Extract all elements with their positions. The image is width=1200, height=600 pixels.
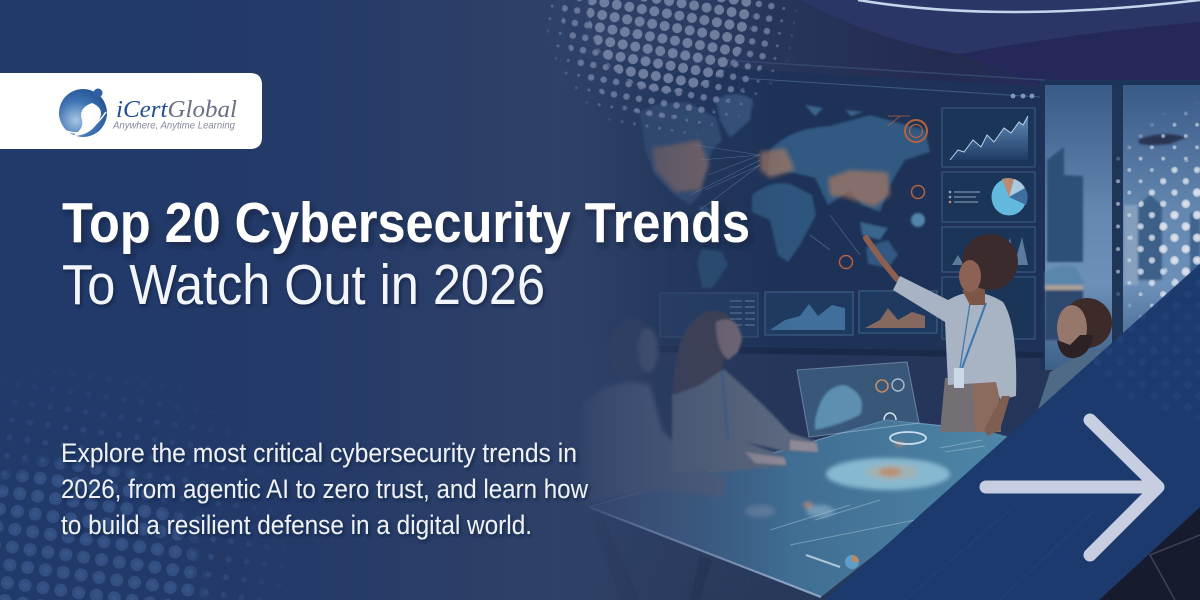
floor bbox=[650, 548, 876, 600]
screen status dots bbox=[1011, 94, 1034, 98]
halftone dots: top centre bbox=[546, 0, 798, 134]
panel: lower right bbox=[942, 277, 1035, 339]
panel: bottom blue area chart bbox=[765, 292, 853, 335]
arrow icon bbox=[986, 420, 1158, 555]
title: Top 20 Cybersecurity Trends bbox=[62, 191, 750, 255]
hot spots bbox=[652, 140, 890, 207]
panel: bottom data table bbox=[660, 293, 758, 337]
description text: Explore the most critical cybersecurity trends in bbox=[61, 438, 577, 468]
seated man bbox=[596, 326, 725, 498]
seated man right bbox=[1037, 298, 1115, 412]
halftone dots: right window bbox=[1116, 103, 1200, 318]
logo panel bbox=[0, 73, 262, 149]
windows with skyline bbox=[1040, 80, 1200, 370]
panel: pie chart bbox=[942, 172, 1035, 222]
description text: 2026, from agentic AI to zero trust, and learn how bbox=[61, 474, 588, 504]
world map bbox=[640, 94, 930, 288]
halftone dots: bottom left bbox=[0, 396, 266, 600]
diagonal blue band bbox=[825, 264, 1200, 600]
panel: spike chart bbox=[942, 227, 1035, 272]
seated woman bbox=[672, 311, 818, 472]
description text bbox=[61, 438, 588, 540]
photo scene: control room bbox=[560, 0, 1200, 600]
glass tablet bbox=[797, 362, 919, 437]
logo wordmark: iCertGlobal bbox=[116, 97, 237, 123]
dark chair corner bbox=[1099, 507, 1200, 600]
title bbox=[62, 191, 750, 317]
panel: line chart bbox=[942, 108, 1035, 167]
ceiling bbox=[714, 0, 1200, 87]
description text: to build a resilient defense in a digital world. bbox=[61, 510, 532, 540]
panel: bottom orange area chart bbox=[859, 291, 937, 333]
wall screen bbox=[636, 56, 1045, 358]
AI threat markers bbox=[840, 116, 927, 268]
table brain hologram bbox=[745, 442, 950, 517]
icon: globe logo bbox=[59, 88, 107, 137]
holographic table bbox=[589, 420, 1020, 600]
standing presenter bbox=[866, 234, 1018, 436]
wall below screen bbox=[560, 340, 1200, 450]
title: To Watch Out in 2026 bbox=[62, 253, 545, 317]
logo tagline: Anywhere, Anytime Learning bbox=[112, 120, 235, 132]
